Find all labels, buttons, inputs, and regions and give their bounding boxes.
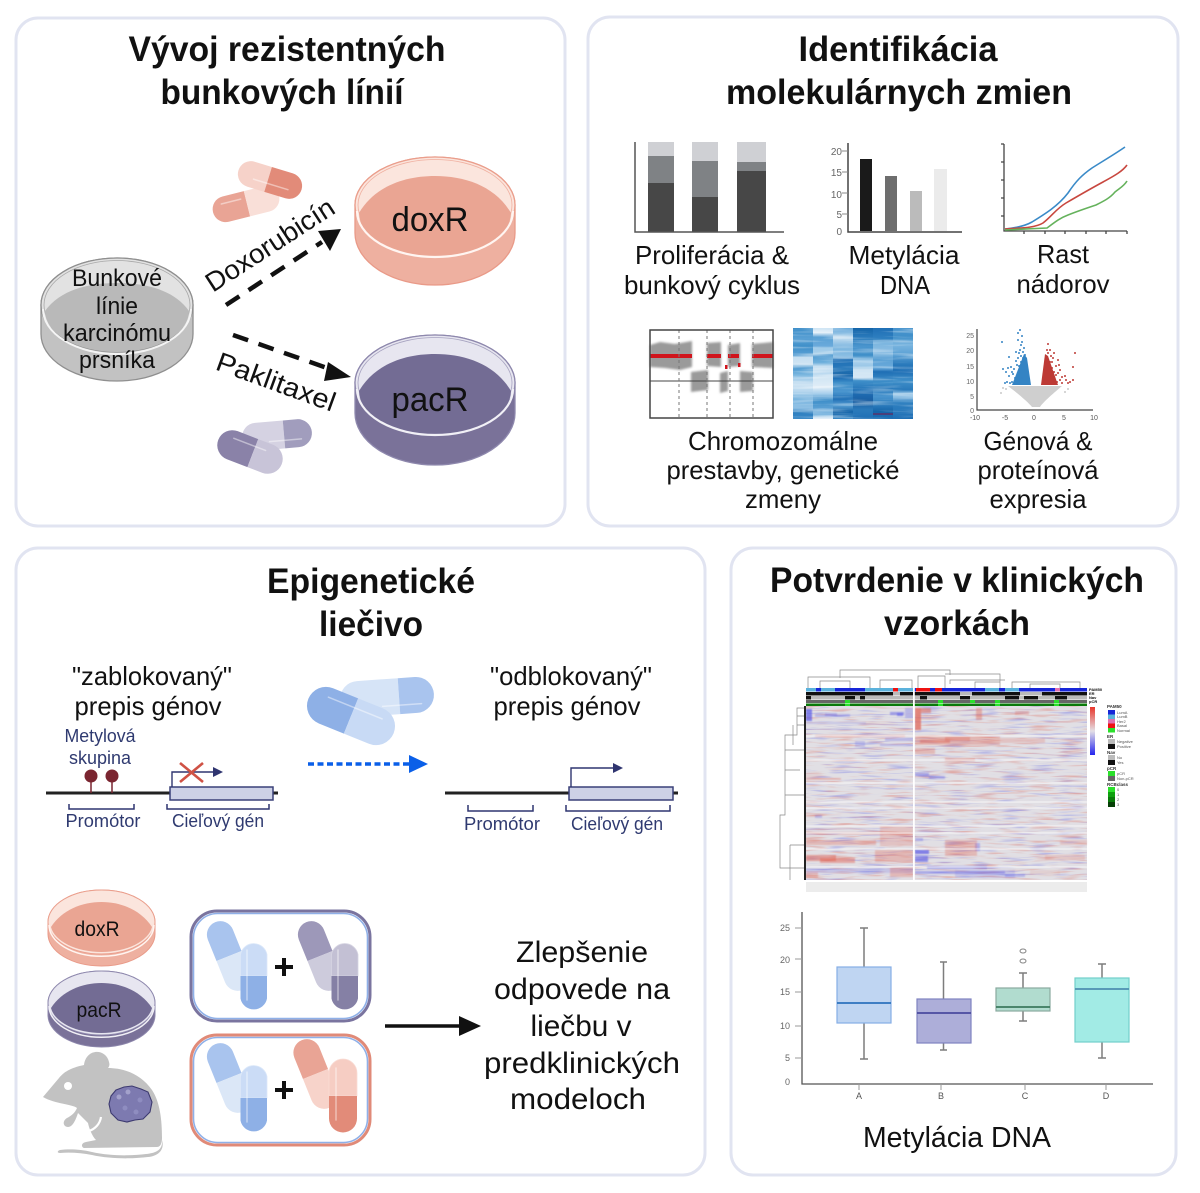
heading: epigenetic drug: liečivo — [319, 605, 423, 644]
chart: clinical heatmap: Positive — [1117, 744, 1132, 749]
icon: grey culture dish — [41, 258, 193, 381]
panel: clinical validation — [731, 548, 1176, 1175]
label: proliferation — [624, 240, 800, 300]
text: cell lines label: línie — [96, 293, 138, 320]
arrow: to pacR — [233, 335, 351, 381]
chart: clinical heatmap: Normal — [1117, 728, 1130, 733]
chart: box plot: A — [856, 1091, 862, 1101]
chart: stacked bars — [635, 142, 784, 232]
chart: box plot: 25 — [780, 923, 790, 933]
box: purple combination — [191, 911, 370, 1021]
icon: small pacR dish: pacR — [76, 999, 122, 1022]
label: unblocked transcription: prepis génov — [494, 691, 640, 721]
chart: clinical heatmap: Basal — [1117, 723, 1127, 728]
chart: methylation bars: 15 — [831, 168, 842, 179]
chart: clinical heatmap — [780, 670, 1134, 892]
chart: volcano plot: 0 — [970, 408, 974, 415]
icon: small doxR dish — [48, 890, 155, 966]
label: DNA methylation: Metylácia DNA — [863, 1122, 1052, 1154]
chart: volcano plot: -10 — [970, 415, 980, 422]
label: unblocked transcription — [490, 661, 652, 721]
chart: volcano plot — [966, 329, 1098, 422]
text: improved response: liečbu v — [530, 1010, 632, 1043]
diagram: blocked gene: Cieľový gén — [172, 811, 264, 831]
icon: mouse with tumor — [43, 1052, 163, 1158]
label: paclitaxel: Paklitaxel — [212, 347, 340, 417]
chart: box plot: 10 — [780, 1021, 790, 1031]
heading: resistant lines: bunkových línií — [160, 73, 405, 112]
chart: box plot: 15 — [780, 987, 790, 997]
label: gene and protein expression: proteínová — [978, 455, 1099, 485]
icon: pacR dish: pacR — [392, 381, 468, 419]
chart: clinical heatmap: RCBclass — [1107, 782, 1129, 787]
chart: clinical heatmap: Negative — [1117, 739, 1134, 744]
chart: chromosome rearrangements — [650, 330, 773, 418]
label: gene and protein expression: Génová & — [984, 426, 1092, 456]
icon: paclitaxel capsules — [213, 418, 313, 478]
label: gene and protein expression — [978, 426, 1099, 514]
text: improved response: predklinických — [484, 1047, 680, 1080]
icon: doxorubicin capsules — [210, 158, 305, 225]
text: cell lines label: Bunkové — [72, 265, 162, 292]
text: improved response: odpovede na — [494, 973, 670, 1006]
text: improved response — [484, 936, 680, 1116]
label: proliferation: bunkový cyklus — [624, 270, 800, 300]
text: improved response: modeloch — [510, 1083, 646, 1116]
chart: clinical heatmap: PAM50 — [1089, 687, 1103, 692]
text: cell lines label: karcinómu — [63, 320, 171, 347]
text: cell lines label: prsníka — [79, 347, 156, 374]
label: methyl group: skupina — [69, 748, 132, 768]
arrow: to doxR — [226, 229, 341, 305]
diagram: blocked gene — [46, 763, 278, 831]
chart: clinical heatmap: No — [1117, 755, 1123, 760]
heading: resistant lines — [128, 30, 446, 112]
text: improved response: Zlepšenie — [516, 936, 648, 969]
box: red combination — [191, 1035, 370, 1145]
heading: molecular changes: molekulárnych zmien — [726, 73, 1072, 112]
chart: clinical heatmap: ER — [1089, 691, 1095, 696]
chart: box plot: D — [1103, 1091, 1110, 1101]
arrow: to outcome — [385, 1016, 481, 1036]
chart: clinical heatmap: LumB — [1117, 714, 1128, 719]
chart: volcano plot: 10 — [966, 379, 974, 386]
chart: volcano plot: -5 — [1002, 415, 1008, 422]
diagram: blocked gene: Promótor — [66, 811, 140, 831]
chart: clinical heatmap: Nav — [1089, 695, 1097, 700]
heading: resistant lines: Vývoj rezistentných — [128, 30, 446, 69]
chart: box plot: C — [1022, 1091, 1029, 1101]
chart: box plot: 0 — [785, 1077, 790, 1087]
chart: methylation bars: 20 — [831, 147, 842, 158]
label: chromosomal rearrangements — [666, 426, 900, 514]
icon: pacR dish — [355, 335, 515, 465]
chart: clinical heatmap: Non-pCR — [1117, 776, 1134, 781]
chart: clinical heatmap: PAM50 — [1107, 704, 1122, 709]
chart: volcano plot: 0 — [1032, 415, 1036, 422]
icon: doxR dish — [355, 157, 515, 285]
chart: tumor growth lines — [1001, 144, 1127, 234]
diagram: unblocked gene — [445, 763, 678, 834]
chart: volcano plot: 10 — [1090, 415, 1098, 422]
chart: methylation bars: 0 — [836, 227, 842, 238]
icon: small pacR dish — [48, 971, 155, 1047]
heading: clinical validation — [770, 561, 1144, 643]
heading: molecular changes — [726, 30, 1072, 112]
label: methyl group — [64, 726, 136, 768]
panel: molecular changes — [588, 17, 1178, 526]
chart: clinical heatmap: 3 — [1117, 802, 1120, 807]
label: blocked transcription — [72, 661, 232, 721]
chart: clinical heatmap: pCR — [1117, 771, 1125, 776]
label: DNA methylation: DNA — [880, 270, 931, 300]
label: DNA methylation: Metylácia — [848, 240, 960, 270]
chart: volcano plot: 25 — [966, 333, 974, 340]
heading: molecular changes: Identifikácia — [798, 30, 998, 69]
icon: small doxR dish: doxR — [74, 918, 120, 941]
label: chromosomal rearrangements: zmeny — [745, 484, 821, 514]
chart: box plot: 5 — [785, 1053, 790, 1063]
chart: clinical heatmap: Yes — [1117, 760, 1124, 765]
chart: clinical heatmap: 2 — [1117, 797, 1120, 802]
label: doxorubicin: Doxorubicín — [200, 192, 340, 298]
panel: epigenetic drug — [16, 548, 705, 1175]
label: gene and protein expression: expresia — [990, 484, 1087, 514]
label: proliferation: Proliferácia & — [635, 240, 789, 270]
chart: box plot: B — [938, 1091, 944, 1101]
chart: methylation bars — [831, 143, 962, 238]
chart: clinical heatmap: LumA — [1117, 710, 1128, 715]
label: blocked transcription: prepis génov — [74, 691, 222, 721]
chart: clinical heatmap: pCR — [1107, 766, 1117, 771]
label: tumor growth: Rast — [1037, 239, 1090, 269]
chart: volcano plot: 15 — [966, 364, 974, 371]
label: blocked transcription: "zablokovaný" — [72, 661, 232, 691]
chart: clinical heatmap: Her2 — [1117, 719, 1126, 724]
chart: box plot: 20 — [780, 955, 790, 965]
heading: clinical validation: vzorkách — [884, 604, 1030, 643]
diagram: unblocked gene: Cieľový gén — [571, 814, 663, 834]
label: unblocked transcription: "odblokovaný" — [490, 661, 652, 691]
label: chromosomal rearrangements: prestavby, genetické — [666, 455, 900, 485]
label: tumor growth: nádorov — [1016, 269, 1110, 299]
heading: epigenetic drug — [267, 562, 475, 644]
icon: doxR dish: doxR — [392, 201, 468, 239]
text: cell lines label — [63, 265, 171, 374]
heading: epigenetic drug: Epigenetické — [267, 562, 475, 601]
chart: methylation bars: 5 — [836, 210, 842, 221]
chart: volcano plot: 5 — [1062, 415, 1066, 422]
label: DNA methylation — [848, 240, 960, 300]
heading: clinical validation: Potvrdenie v klinických — [770, 561, 1144, 600]
chart: clinical heatmap: 0 — [1117, 787, 1120, 792]
panel: resistant cell lines — [16, 18, 565, 526]
chart: box plot — [780, 912, 1153, 1101]
chart: clinical heatmap: pCR — [1089, 699, 1097, 704]
arrow: dotted blue — [308, 755, 428, 773]
chart: clinical heatmap: Nav — [1107, 750, 1116, 755]
icon: epigenetic drug capsules — [301, 676, 435, 751]
chart: blue expression heatmap — [793, 328, 913, 419]
diagram: unblocked gene: Promótor — [464, 814, 540, 834]
chart: clinical heatmap: 1 — [1117, 792, 1120, 797]
chart: volcano plot: 5 — [970, 394, 974, 401]
label: chromosomal rearrangements: Chromozomálne — [688, 426, 878, 456]
chart: methylation bars: 10 — [831, 190, 842, 201]
chart: clinical heatmap: ER — [1107, 734, 1114, 739]
label: methyl group: Metylová — [64, 726, 136, 746]
chart: volcano plot: 20 — [966, 348, 974, 355]
label: tumor growth — [1016, 239, 1110, 299]
